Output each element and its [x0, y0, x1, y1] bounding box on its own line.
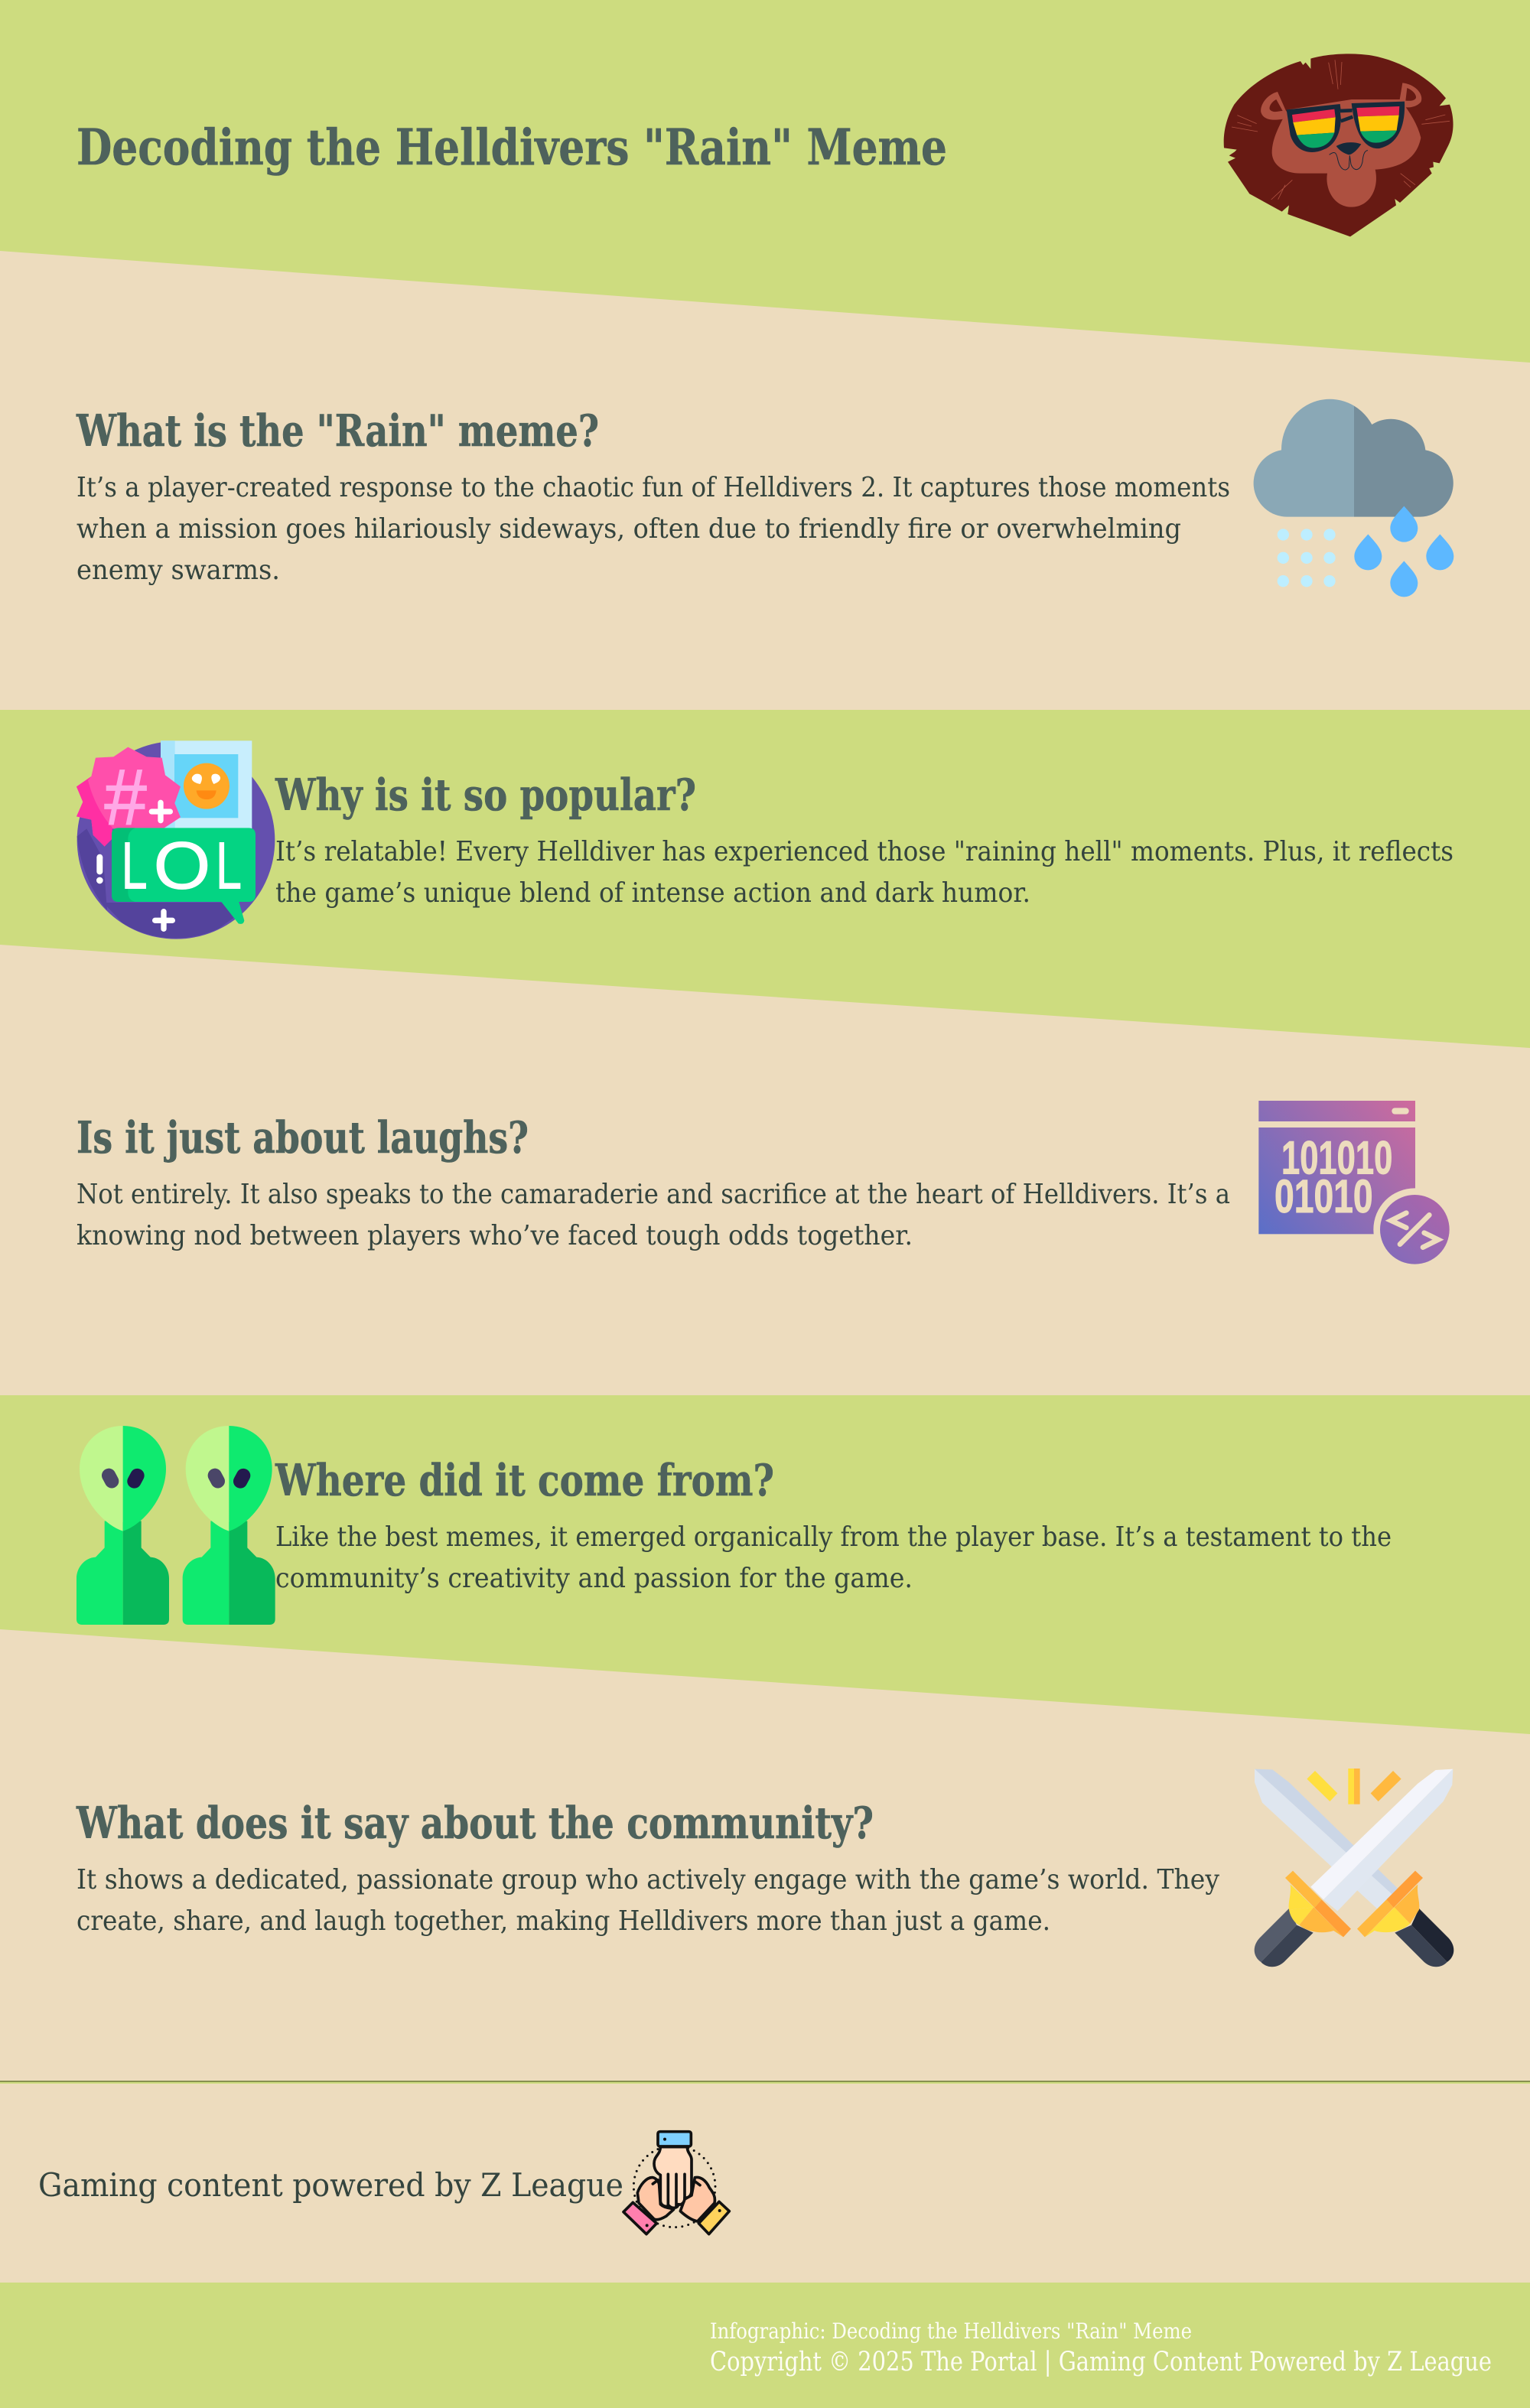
body text: It’s relatable! Every Helldiver has experienced those "raining hell" moments. Plus, it reflects	[275, 836, 1454, 867]
body text: knowing nod between players who’ve faced tough odds together.	[76, 1220, 913, 1251]
panel: what is the rain meme	[76, 399, 1454, 597]
hash symbol: #	[105, 752, 147, 841]
heading: Why is it so popular?	[275, 770, 696, 821]
footer text: Infographic: Decoding the Helldivers "Rain" Meme	[710, 2319, 1192, 2344]
divider line	[0, 2081, 1530, 2082]
body text: create, share, and laugh together, making Helldivers more than just a game.	[76, 1905, 1050, 1937]
band: section 2 background	[0, 710, 1530, 1048]
footer band	[0, 2283, 1530, 2408]
icon: rain cloud	[1254, 399, 1454, 597]
icon: crossed swords	[1255, 1769, 1454, 1967]
body text: Not entirely. It also speaks to the camaraderie and sacrifice at the heart of Helldivers. It’s a	[76, 1179, 1230, 1210]
body text: Like the best memes, it emerged organically from the player base. It’s a testament to the	[275, 1521, 1392, 1553]
body text: community’s creativity and passion for the game.	[275, 1563, 913, 1594]
LOL lettering: L	[122, 828, 148, 903]
icon: lion with sunglasses	[1224, 54, 1454, 236]
heading: What is the "Rain" meme?	[76, 405, 599, 457]
panel: is it just about laughs	[76, 1101, 1456, 1271]
panel: why is it so popular	[76, 740, 1454, 939]
binary digits: 101010	[1281, 1131, 1392, 1184]
body text: It shows a dedicated, passionate group who actively engage with the game’s world. They	[76, 1864, 1219, 1895]
icon: three joined hands	[623, 2132, 729, 2234]
icon: two aliens	[76, 1426, 275, 1625]
heading: Is it just about laughs?	[76, 1112, 529, 1163]
LOL lettering: O	[154, 828, 210, 903]
body text: the game’s unique blend of intense action and dark humor.	[275, 877, 1030, 909]
panel: where did it come from	[76, 1426, 1392, 1625]
body text	[76, 1864, 1219, 1937]
body text	[76, 1179, 1230, 1251]
body text: when a mission goes hilariously sideways, often due to friendly fire or overwhelming	[76, 513, 1181, 545]
panel: what does it say about the community	[76, 1769, 1454, 1967]
body text: It’s a player-created response to the chaotic fun of Helldivers 2. It captures those moments	[76, 472, 1230, 503]
icon: LOL social badge	[76, 740, 275, 939]
body text	[275, 836, 1454, 909]
body text: enemy swarms.	[76, 555, 280, 586]
body text	[275, 1521, 1392, 1594]
LOL lettering	[122, 828, 242, 903]
band: section 4 background	[0, 1395, 1530, 1734]
icon: binary code window: 01010	[1274, 1170, 1373, 1223]
title: Decoding the Helldivers "Rain" Meme	[76, 119, 947, 177]
heading: What does it say about the community?	[76, 1798, 874, 1849]
body text	[76, 472, 1230, 586]
panel: powered by Z League	[38, 2132, 729, 2234]
sponsor text: Gaming content powered by Z League	[38, 2166, 623, 2204]
LOL lettering: L	[216, 828, 242, 903]
footer text	[710, 2319, 1492, 2377]
heading: Where did it come from?	[275, 1455, 774, 1506]
icon: binary code window	[1258, 1101, 1456, 1271]
header band	[0, 0, 1530, 363]
